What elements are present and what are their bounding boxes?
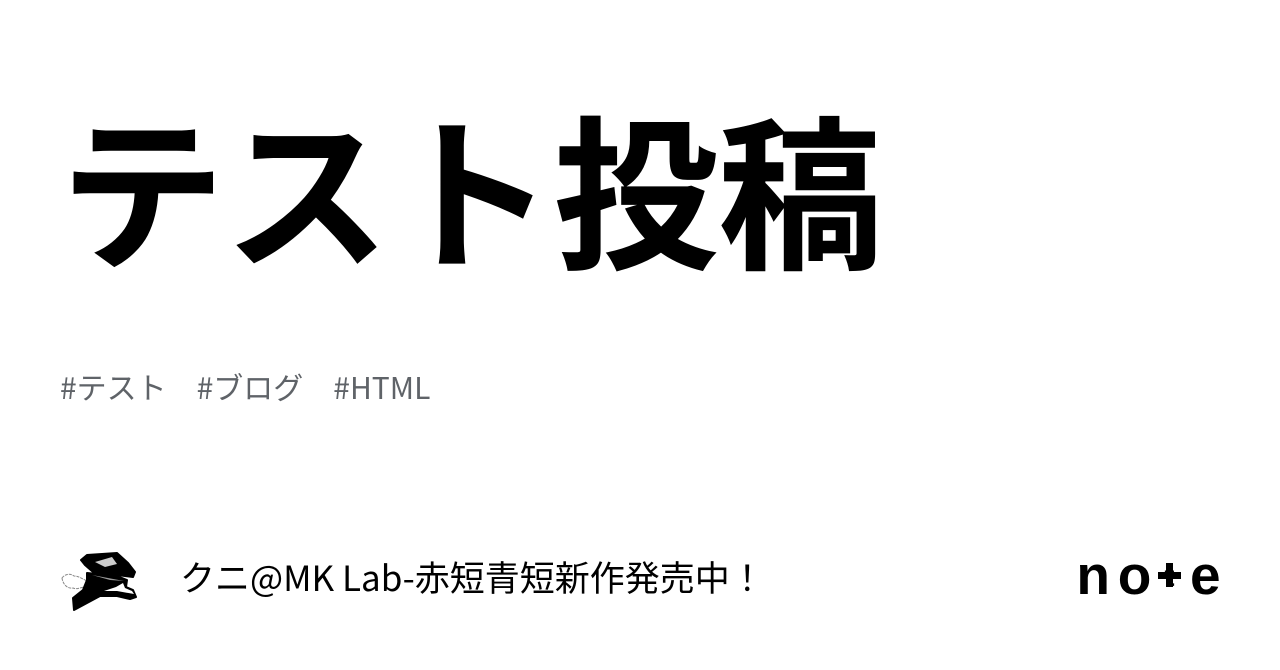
note logo: e	[1190, 544, 1221, 606]
author name: クニ@MK Lab-赤短青短新作発売中！	[180, 551, 765, 602]
note logo: n	[1076, 544, 1110, 606]
title: テスト投稿	[60, 66, 883, 304]
icon: author avatar	[62, 552, 137, 611]
note logo	[1076, 544, 1221, 606]
note logo: o	[1118, 544, 1151, 606]
hashtags: #テスト #ブログ #HTML	[60, 364, 430, 408]
note logo: t	[1164, 560, 1174, 593]
